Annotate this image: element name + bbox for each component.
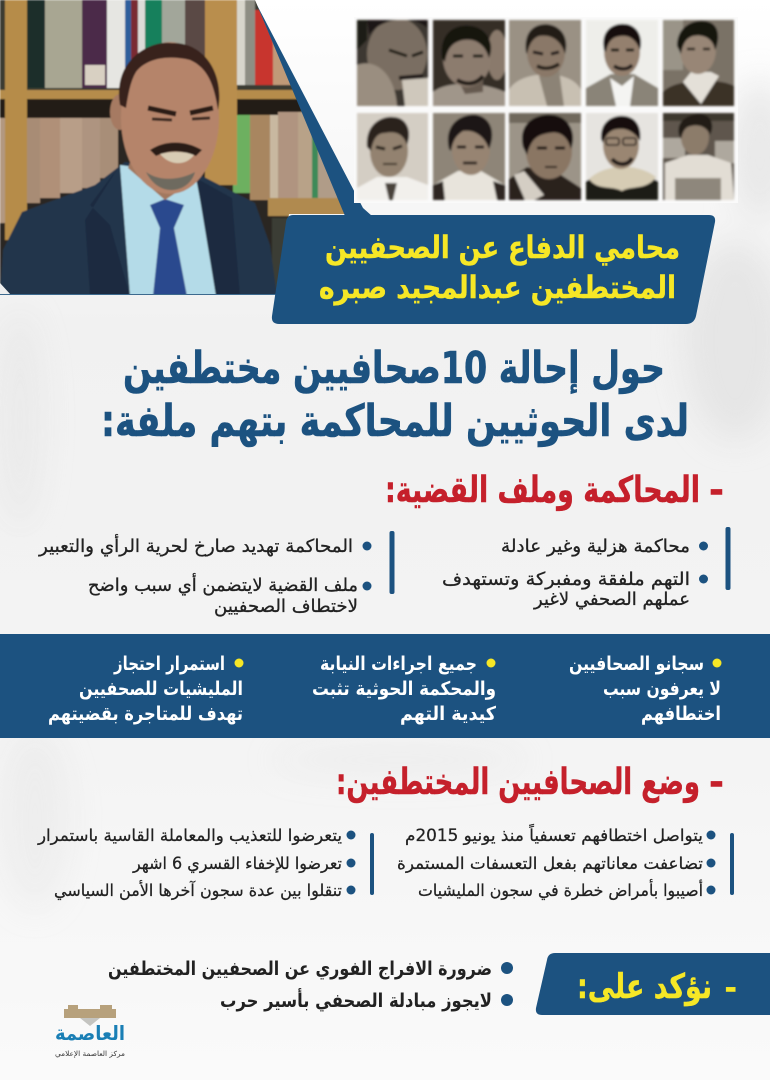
shelves and books [0,0,370,290]
logo: Al-Asima media center: العاصمة [55,1021,125,1045]
blue band [0,634,770,738]
section heading: trial and case file: - [709,470,724,511]
banner text: المختطفين عبدالمجيد صبره [319,270,676,306]
panel: status points left: يتعرضوا للتعذيب والمعاملة القاسية باستمرار [37,826,342,846]
hair [119,43,219,110]
panel: trial points left [38,531,394,617]
band column: left: استمرار احتجاز [113,653,225,675]
banner text [319,230,680,306]
band column: middle [312,653,497,725]
portrait 8 [507,111,583,202]
tie [150,199,187,296]
panel: status points right [397,823,734,901]
band column: right: اختطافهم [641,703,721,725]
panel: we affirm points: ضرورة الافراج الفوري عن الصحفيين المختطفين [108,958,492,981]
diagonal blue stripe [257,5,372,216]
portraits grid [354,17,738,203]
lapels [86,180,128,294]
panel: status points left: تنقلوا بين عدة سجون آخرها الأمن السياسي [54,880,342,901]
portrait 9 [584,112,660,202]
band column: left: المليشيات للصحفيين [79,678,243,700]
portrait 2 [431,18,507,108]
panel: trial points right: عملهم الصحفي لاغير [533,589,690,610]
panel: trial points right: محاكمة هزلية وغير عادلة [501,536,690,557]
photo: lawyer in front of bookshelf [0,0,370,300]
banner text: محامي الدفاع عن الصحفيين [325,230,680,266]
band column: middle: جميع اجراءات النيابة [320,653,477,675]
logo: Al-Asima media center [55,1005,125,1058]
logo: Al-Asima media center: مركز العاصمة الإعلامي [55,1050,125,1058]
portrait 3 [508,18,582,108]
band column: right [569,653,722,725]
portrait 4 [584,20,660,108]
band column: left [48,653,244,725]
portrait 10 [661,111,736,202]
panel: trial points right: التهم ملفقة ومفبركة وتستهدف [442,569,690,590]
band column: middle: كيدية التهم [400,703,497,725]
brows and eyes [148,108,213,114]
shirt [120,165,216,296]
neck [128,162,175,201]
panel: status points right: أصيبوا بأمراض خطرة في سجون المليشيات [418,879,703,901]
suit [0,162,277,296]
panel: we affirm points [108,958,513,1012]
tag: we affirm: - [725,971,737,1006]
band column: right: لا يعرفون سبب [603,678,721,700]
panel: status points right: يتواصل اختطافهم تعسفياً منذ يونيو 2015م [405,823,703,846]
band column: left: تهدف للمتاجرة بقضيتهم [48,703,243,725]
portrait 7 [431,112,507,202]
teeth [160,152,194,163]
banner: lawyer title [272,215,715,324]
white corner at bottom left [0,283,10,294]
goatee [146,172,195,190]
section heading: status of journalists: - [709,762,724,803]
face [121,42,219,194]
panel: we affirm points: لايجوز مبادلة الصحفي بأسير حرب [220,988,492,1012]
band column: right: سجانو الصحافيين [569,653,704,675]
band column: middle: والمحكمة الحوثية تثبت [312,678,496,700]
panel: trial points right [442,527,730,610]
main title: حول إحالة 10صحافيين مختطفين [123,343,665,394]
panel: status points left: تعرضوا للإخفاء القسري 6 اشهر [132,854,342,874]
ear [108,94,122,131]
portrait 6 [356,112,429,202]
logo buildings [64,1005,116,1026]
panel: trial points left: ملف القضية لايتضمن أي سبب واضح [88,573,358,596]
tag: we affirm [536,953,770,1015]
portrait 5 [661,18,736,108]
panel: trial points left: لاختطاف الصحفيين [214,596,358,617]
mustache [150,142,202,156]
tag: we affirm: نؤكد على: [577,967,712,1007]
panel: status points right: تضاعفت معاناتهم بفعل التعسفات المستمرة [397,854,703,874]
portrait 1 [355,18,430,108]
main title [101,343,689,447]
panel: status points left [37,826,374,901]
panel: trial points left: المحاكمة تهديد صارخ لحرية الرأي والتعبير [38,534,353,557]
